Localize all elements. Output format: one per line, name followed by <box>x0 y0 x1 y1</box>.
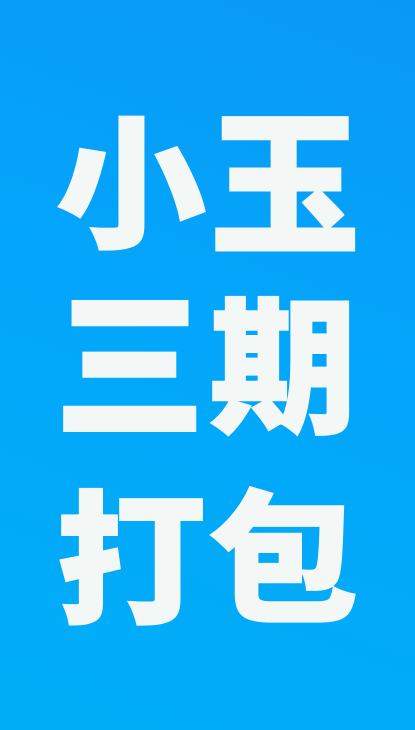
title line 1: 小玉: 玉 <box>210 100 360 274</box>
title line 2: 三期: 三 <box>55 277 205 459</box>
title line 2: 三期: 期 <box>210 288 357 452</box>
title line 2: 三期 <box>55 277 357 459</box>
title line 3: 打包 <box>56 480 358 643</box>
title line 1: 小玉: 小 <box>56 107 206 267</box>
title line 1: 小玉 <box>56 100 360 274</box>
title line 3: 打包: 包 <box>208 480 358 642</box>
title line 3: 打包: 打 <box>56 481 206 643</box>
